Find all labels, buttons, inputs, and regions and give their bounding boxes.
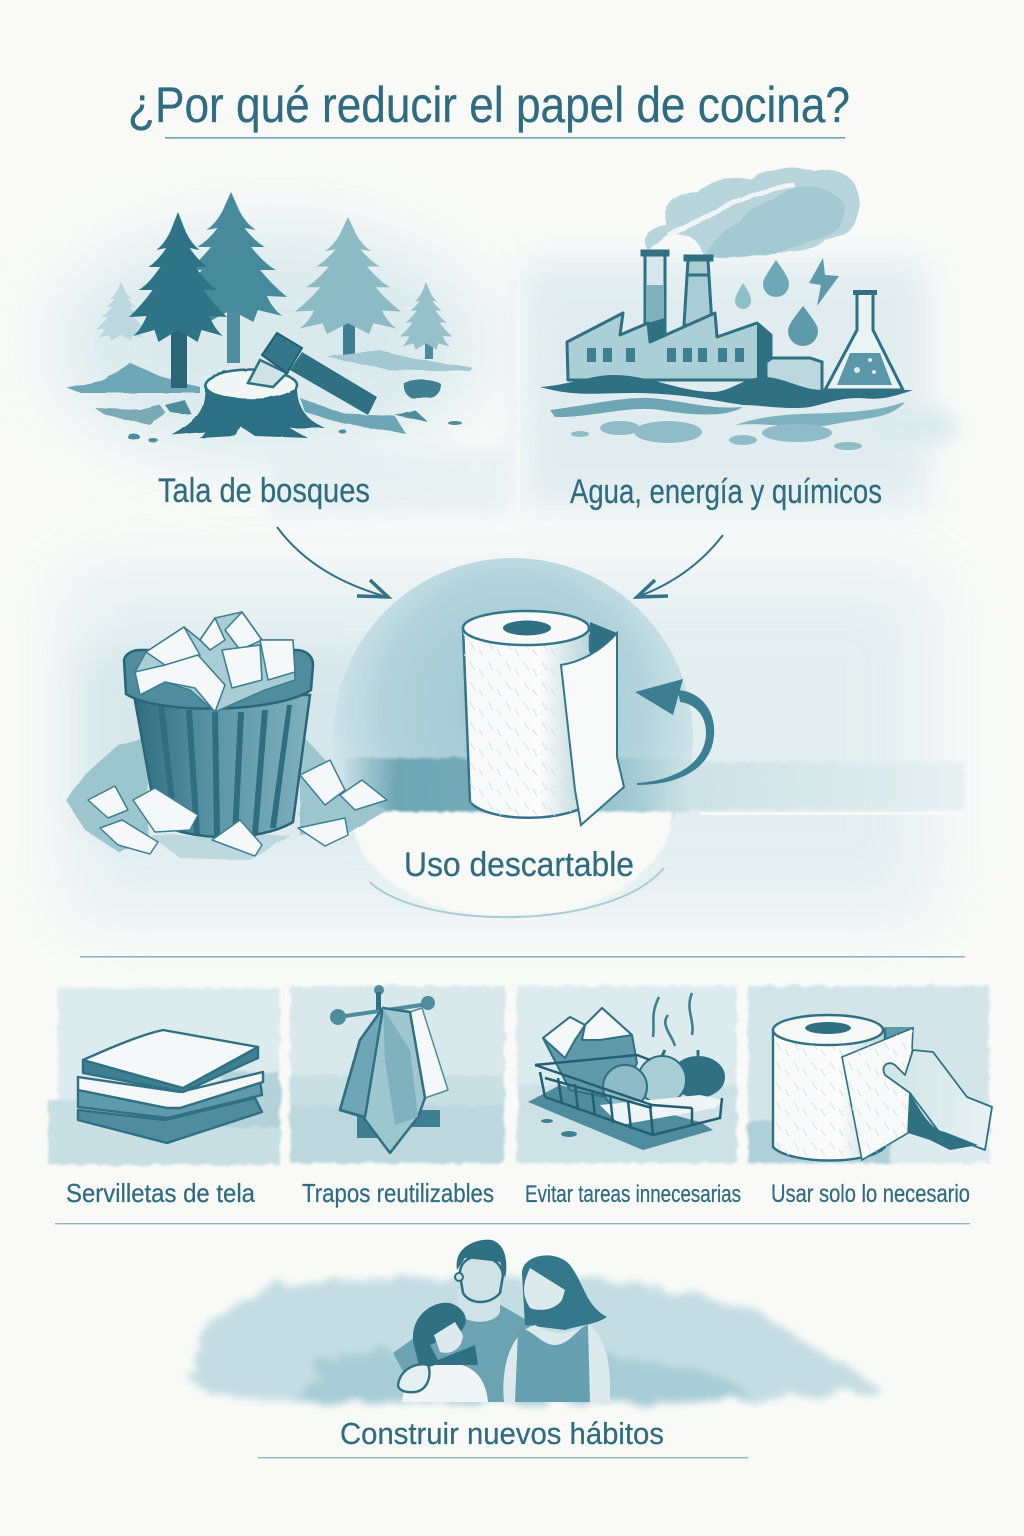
panel wash	[517, 986, 737, 1163]
basket	[535, 1055, 722, 1135]
produce	[543, 1008, 724, 1109]
folded cloths	[78, 1030, 263, 1143]
smoke	[645, 168, 859, 258]
towels	[340, 1008, 448, 1153]
divider	[80, 956, 965, 958]
label: construir nuevos hábitos: Construir nuevos hábitos	[340, 1416, 664, 1451]
label: agua energía y químicos: Agua, energía y químicos	[570, 473, 882, 511]
panel wash	[48, 988, 280, 1165]
small roll	[773, 1015, 913, 1160]
spots	[541, 1119, 577, 1137]
towel rod	[330, 985, 435, 1025]
bin rim	[124, 650, 313, 709]
center circle	[333, 558, 693, 918]
panel: factory	[540, 168, 960, 450]
table shadow	[528, 1085, 713, 1150]
small stump and debris	[95, 379, 462, 442]
bin slats	[158, 705, 292, 836]
label: servilletas de tela: Servilletas de tela	[66, 1178, 255, 1208]
paper piles	[66, 733, 387, 860]
label: usar solo lo necesario: Usar solo lo necesario	[771, 1180, 970, 1208]
water	[540, 375, 960, 450]
steam	[653, 993, 693, 1046]
trash bin	[66, 612, 387, 860]
panel: trapos reutilizables	[290, 985, 505, 1163]
hand	[883, 1050, 992, 1150]
title: ¿Por qué reducir el papel de cocina?	[128, 77, 850, 133]
panel wash	[290, 986, 505, 1163]
child	[398, 1303, 488, 1402]
drops	[735, 260, 818, 346]
divider	[55, 1223, 970, 1224]
loose paper	[88, 760, 387, 856]
arrows into center	[277, 527, 723, 597]
family scene	[195, 1240, 880, 1403]
crumpled paper in bin	[135, 612, 295, 712]
tank	[766, 358, 822, 392]
curved reuse arrow	[635, 679, 714, 785]
wash	[195, 1278, 880, 1403]
front trees	[129, 192, 287, 388]
chimneys	[642, 251, 712, 335]
bin body	[134, 695, 310, 837]
panel: usar solo lo necesario	[748, 986, 992, 1163]
label: evitar tareas innecesarias: Evitar tareas innecesarias	[525, 1181, 741, 1208]
shadow behind sheet	[883, 1027, 913, 1060]
paper roll	[463, 611, 624, 825]
stump	[172, 370, 405, 438]
background watercolor washes	[55, 230, 965, 915]
factory building	[567, 313, 771, 382]
panel: evitar tareas	[517, 986, 737, 1163]
back ground	[67, 350, 473, 393]
label: uso descartable: Uso descartable	[404, 846, 634, 884]
father	[393, 1240, 530, 1402]
panel wash	[748, 986, 990, 1163]
flask	[825, 290, 903, 390]
back trees	[96, 217, 452, 359]
mother	[503, 1255, 610, 1402]
axe	[248, 333, 377, 415]
panel: forest	[67, 192, 473, 442]
lightning	[809, 258, 839, 306]
plate	[600, 1095, 723, 1125]
panel: servilletas de tela	[48, 988, 280, 1165]
divider	[258, 1457, 748, 1458]
label: trapos reutilizables: Trapos reutilizables	[302, 1178, 494, 1208]
label: tala de bosques: Tala de bosques	[158, 472, 370, 510]
